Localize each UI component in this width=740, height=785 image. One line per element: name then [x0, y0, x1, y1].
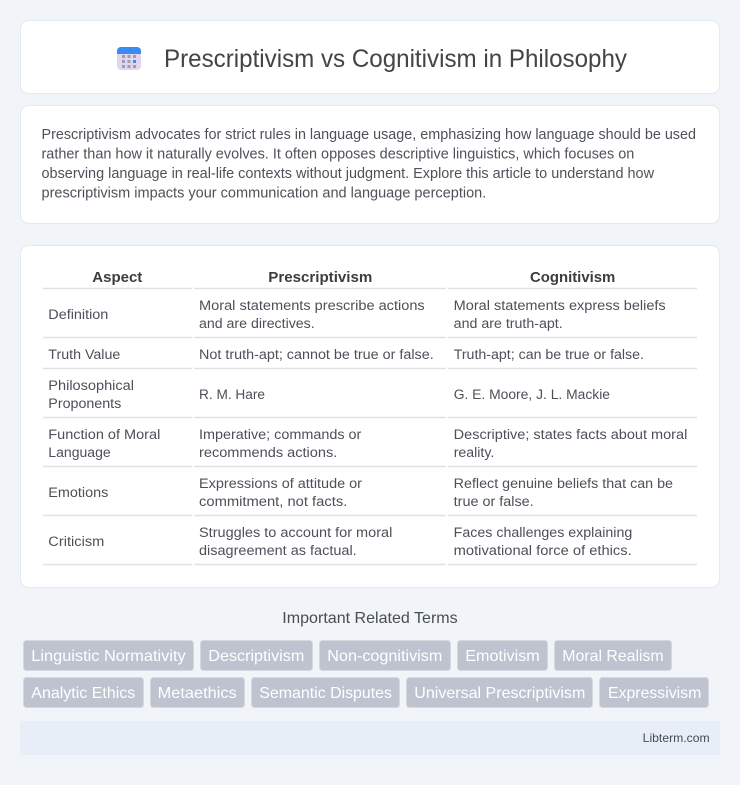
row: criticism: Criticism	[48, 534, 104, 550]
row: truth value: Truth-apt; can be true or false.	[454, 347, 644, 363]
tag: Analytic Ethics	[24, 678, 144, 708]
footer	[20, 721, 720, 755]
row: function of moral language: reality.	[454, 445, 494, 461]
row: emotions: true or false.	[454, 494, 534, 510]
row: emotions	[48, 476, 673, 510]
intro text: rather than how it naturally evolves. It often opposes descriptive linguistics, which focuses on	[42, 146, 634, 162]
table header: Cognitivism	[530, 269, 615, 286]
tag: Moral Realism: Moral Realism	[562, 648, 664, 665]
row: truth value	[48, 347, 644, 363]
tag: Universal Prescriptivism: Universal Prescriptivism	[414, 685, 585, 702]
tag: Expressivism: Expressivism	[608, 685, 701, 702]
tag: Metaethics: Metaethics	[158, 685, 237, 702]
row: emotions: Reflect genuine beliefs that can be	[454, 476, 673, 492]
related term tags	[24, 640, 708, 708]
tag: Universal Prescriptivism	[406, 678, 592, 708]
table header: Aspect	[92, 269, 142, 286]
tag: Moral Realism	[554, 640, 672, 670]
tag: Expressivism	[600, 678, 708, 708]
row: definition: Moral statements express beliefs	[454, 298, 666, 314]
tag: Metaethics	[150, 678, 244, 708]
tag: Analytic Ethics: Analytic Ethics	[31, 685, 135, 702]
intro text	[42, 127, 696, 202]
tag: Non-cognitivism: Non-cognitivism	[327, 648, 442, 665]
tag: Semantic Disputes	[252, 678, 400, 708]
intro text: observing language in real-life contexts without judgment. Explore this article to understand how	[42, 166, 654, 182]
row: philosophical proponents: Philosophical	[48, 378, 134, 394]
row: definition: Definition	[48, 307, 108, 323]
row: function of moral language: Function of Moral	[48, 427, 160, 443]
panel: comparison table	[20, 246, 720, 588]
row: function of moral language: Imperative; commands or	[199, 427, 362, 443]
row: function of moral language: recommends actions.	[199, 445, 337, 461]
row: function of moral language	[48, 427, 687, 461]
table header: Prescriptivism	[268, 269, 372, 286]
row: definition	[48, 298, 666, 332]
tag: Descriptivism	[200, 640, 312, 670]
footer credit: Libterm.com	[643, 731, 710, 745]
row: truth value: Not truth-apt; cannot be true or false.	[199, 347, 434, 363]
row: philosophical proponents: Proponents	[48, 396, 121, 412]
row: philosophical proponents: G. E. Moore, J. L. Mackie	[454, 387, 610, 403]
panel: header	[20, 20, 720, 94]
row: criticism	[48, 525, 632, 559]
row: truth value: Truth Value	[48, 347, 120, 363]
row: criticism: disagreement as factual.	[199, 543, 357, 559]
row: emotions: commitment, not facts.	[199, 494, 347, 510]
tag: Linguistic Normativity	[24, 640, 194, 670]
row: criticism: motivational force of ethics.	[454, 543, 632, 559]
icon: calendar	[117, 47, 141, 70]
row: philosophical proponents	[48, 378, 610, 412]
tag: Non-cognitivism	[320, 640, 450, 670]
row: definition: and are directives.	[199, 316, 315, 332]
tag: Emotivism: Emotivism	[465, 648, 540, 665]
intro text: Prescriptivism advocates for strict rules in language usage, emphasizing how language should be used	[42, 127, 696, 143]
tag: Linguistic Normativity: Linguistic Normativity	[31, 648, 186, 665]
table header	[92, 269, 615, 286]
title: Prescriptivism vs Cognitivism in Philosophy	[164, 45, 627, 73]
tag: Semantic Disputes: Semantic Disputes	[259, 685, 392, 702]
row: emotions: Expressions of attitude or	[199, 476, 362, 492]
tag: Emotivism	[458, 640, 548, 670]
row: emotions: Emotions	[48, 485, 108, 501]
row: function of moral language: Descriptive; states facts about moral	[454, 427, 687, 443]
row: philosophical proponents: R. M. Hare	[199, 387, 265, 403]
panel: introduction	[20, 106, 720, 224]
heading: related terms: Important Related Terms	[282, 610, 458, 627]
row: function of moral language: Language	[48, 445, 111, 461]
tag: Descriptivism: Descriptivism	[208, 648, 304, 665]
row: criticism: Faces challenges explaining	[454, 525, 632, 541]
row: definition: Moral statements prescribe actions	[199, 298, 425, 314]
row: criticism: Struggles to account for moral	[199, 525, 392, 541]
intro text: prescriptivism impacts your communication and language perception.	[42, 186, 486, 202]
row: definition: and are truth-apt.	[454, 316, 563, 332]
